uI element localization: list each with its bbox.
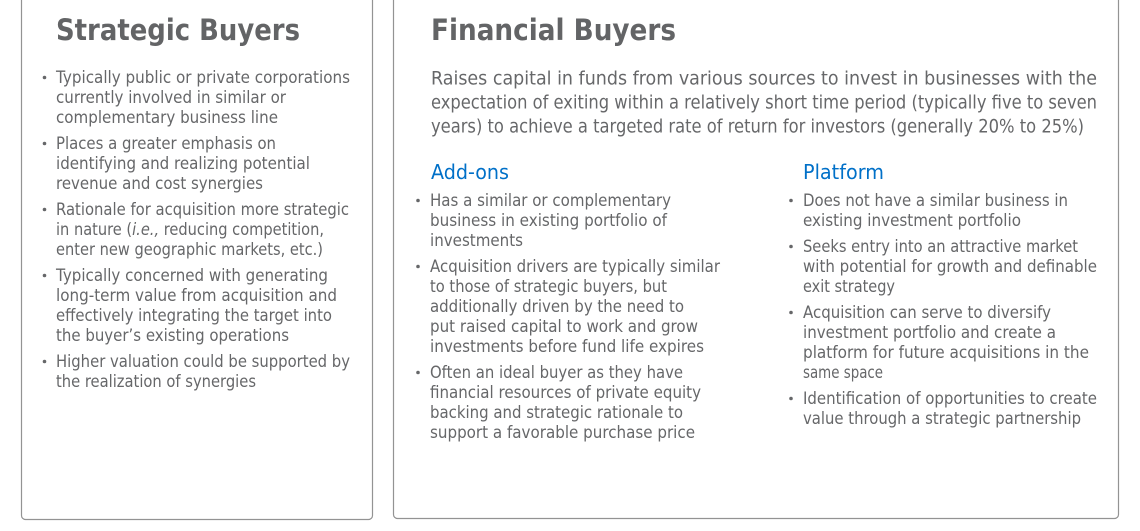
bullet: higher valuation — [43, 352, 350, 391]
bullet: corporations: complementary business line — [56, 108, 278, 127]
bullet: rationale: enter new geographic markets, etc.) — [56, 240, 323, 259]
bullet: similar business: investments — [430, 231, 523, 250]
column: platform — [789, 160, 1097, 428]
bullet: similar business: Has a similar or complementary — [430, 191, 671, 210]
bullet: diversify portfolio: platform for future acquisitions in the — [803, 343, 1089, 362]
bullet: ideal buyer: Often an ideal buyer as they have — [430, 363, 683, 382]
column: add-ons — [416, 160, 720, 442]
bullet: rationale: Rationale for acquisition more strategic — [56, 200, 349, 219]
bullet: rationale: in nature (i.e., reducing competition, — [56, 220, 324, 239]
bullet: diversify portfolio — [789, 303, 1089, 382]
intro paragraph: Raises capital in funds from various sources to invest in businesses with the — [431, 68, 1097, 90]
bullet: long-term value: effectively integrating the target into — [56, 306, 332, 325]
bullet: synergies emphasis: Places a greater emphasis on — [56, 134, 276, 153]
panel: strategic buyers — [22, 0, 372, 520]
bullet: diversify portfolio: Acquisition can serve to diversify — [803, 303, 1051, 322]
bullet: no similar business: existing investment portfolio — [803, 211, 1021, 230]
bullet: diversify portfolio: investment portfolio and create a — [803, 323, 1056, 342]
bullet: corporations: currently involved in similar or — [56, 88, 286, 107]
bullet: acquisition drivers: additionally driven by the need to — [430, 297, 684, 316]
bullet: attractive market: with potential for growth and definable — [803, 257, 1097, 276]
bullet: acquisition drivers: put raised capital to work and grow — [430, 317, 698, 336]
intro paragraph — [431, 68, 1097, 138]
bullet: acquisition drivers: to those of strategic buyers, but — [430, 277, 668, 296]
bullet: long-term value: long-term value from acquisition and — [56, 286, 337, 305]
bullet: strategic partnership: value through a strategic partnership — [803, 409, 1081, 428]
bullet: acquisition drivers: investments before fund life expires — [430, 337, 704, 356]
bullet: similar business — [416, 191, 671, 250]
bullet: no similar business: Does not have a similar business in — [803, 191, 1068, 210]
bullet: attractive market — [789, 237, 1097, 296]
bullet: ideal buyer: support a favorable purchase price — [430, 423, 695, 442]
bullet: synergies emphasis: revenue and cost synergies — [56, 174, 263, 193]
heading: strategic buyers: Strategic Buyers — [56, 13, 300, 47]
bullet: higher valuation: the realization of synergies — [56, 372, 256, 391]
bullet: long-term value: Typically concerned with generating — [55, 266, 328, 285]
bullet: acquisition drivers: Acquisition drivers are typically similar — [430, 257, 720, 276]
bullet: attractive market: Seeks entry into an attractive market — [803, 237, 1079, 256]
bullet: strategic partnership — [789, 389, 1097, 428]
bullet: attractive market: exit strategy — [803, 277, 895, 296]
bullet: ideal buyer: backing and strategic rationale to — [430, 403, 683, 422]
heading: financial buyers: Financial Buyers — [431, 13, 676, 47]
subheading: add-ons: Add-ons — [431, 160, 509, 184]
bullet: similar business: business in existing portfolio of — [430, 211, 668, 230]
panel: financial buyers — [394, 0, 1118, 518]
bullet: no similar business — [789, 191, 1068, 230]
subheading: platform: Platform — [803, 160, 884, 184]
bullet: ideal buyer: financial resources of private equity — [430, 383, 701, 402]
bullet: synergies emphasis: identifying and realizing potential — [56, 154, 310, 173]
bullet: acquisition drivers — [416, 257, 720, 356]
bullet: ideal buyer — [416, 363, 701, 442]
bullet: corporations: Typically public or private corporations — [55, 68, 350, 87]
bullet: diversify portfolio: same space — [803, 363, 883, 382]
bullet: higher valuation: Higher valuation could be supported by — [56, 352, 350, 371]
bullet: corporations — [43, 68, 350, 127]
bullet: rationale — [43, 200, 349, 259]
bullet: synergies emphasis — [43, 134, 310, 193]
bullet: long-term value: the buyer’s existing operations — [56, 326, 289, 345]
bullet: long-term value — [43, 266, 337, 345]
bullet: strategic partnership: Identification of opportunities to create — [803, 389, 1097, 408]
